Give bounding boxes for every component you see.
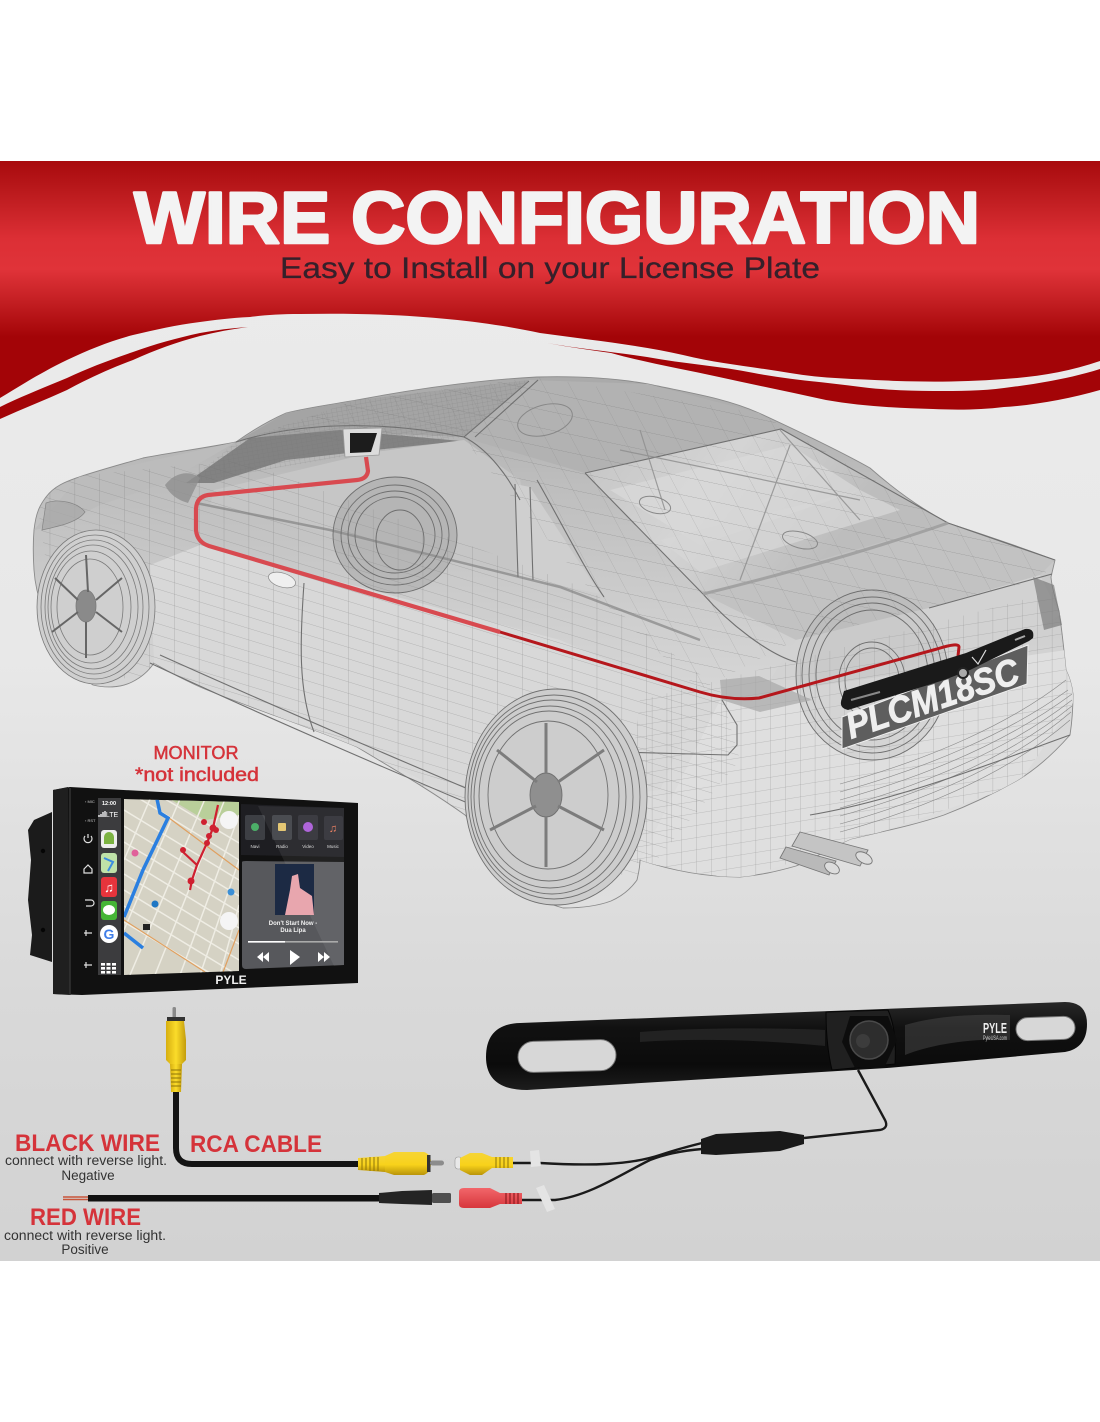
side panel (53, 787, 70, 995)
google letter: G (104, 926, 115, 942)
app music (101, 877, 117, 897)
locate button (220, 912, 238, 930)
bar camera lens (958, 668, 968, 678)
heading: RED WIRE (30, 1204, 141, 1231)
navi pin (251, 823, 259, 831)
strain ribs (171, 1070, 181, 1086)
front interior wheel (333, 477, 457, 593)
left swoosh (0, 327, 248, 419)
app labels: Navi (250, 844, 260, 849)
message bubble (103, 905, 115, 915)
grey panel background (0, 161, 1100, 1261)
white tip (455, 1157, 462, 1169)
reset labels: ‹ RST (85, 818, 96, 823)
right mounting slot (1016, 1016, 1075, 1041)
left button icons (84, 834, 94, 968)
inline connector (701, 1131, 804, 1155)
signal bars (99, 811, 105, 817)
rewind control (257, 952, 269, 962)
hood (34, 442, 236, 530)
mount holes (41, 849, 45, 853)
plate text: PLCM18SC (841, 650, 1025, 747)
monitor body (53, 787, 358, 995)
red wire route on car (196, 457, 959, 699)
cable tag red (536, 1185, 555, 1212)
progress bar (248, 941, 338, 943)
reset labels: ‹ MIC (85, 799, 95, 804)
signal: LTE (106, 812, 118, 819)
bar slot left (851, 692, 880, 700)
album art (275, 864, 314, 915)
collar (427, 1155, 430, 1172)
horizontal plug pin (430, 1160, 444, 1166)
app tile navi (245, 815, 265, 840)
pink pin (132, 850, 138, 856)
app maps (101, 853, 117, 873)
rear seats (610, 446, 860, 522)
vertical plug pin (172, 1007, 176, 1018)
monitor heading: MONITOR (154, 743, 238, 763)
DC plug tip (432, 1193, 451, 1203)
horizontal plug body (385, 1152, 431, 1175)
upper fine mesh (196, 382, 526, 476)
rear deck (1020, 576, 1060, 616)
headrests (514, 398, 819, 552)
roof mesh (236, 377, 1055, 690)
forward control (318, 952, 330, 962)
bar slot right (1015, 636, 1025, 640)
orange avenues (124, 815, 239, 975)
red female power connector (459, 1188, 522, 1208)
map screen (124, 799, 239, 976)
android glyph (104, 832, 114, 844)
female RCA connector (455, 1153, 513, 1175)
lead to power (522, 1149, 702, 1200)
rear taillight (1033, 577, 1062, 630)
track artist: Dua Lipa (280, 928, 306, 934)
car stereo monitor (28, 787, 358, 995)
car panels and mesh (34, 377, 1075, 880)
screen glare (258, 806, 344, 966)
play control (290, 950, 300, 965)
zoom button (220, 811, 238, 829)
app grid (101, 963, 116, 974)
bar body (486, 1002, 1087, 1090)
horizontal ribs (362, 1157, 378, 1171)
door handle (267, 569, 297, 591)
car body (33, 377, 1073, 908)
backup camera bar (486, 1002, 1087, 1090)
app labels: Video (302, 844, 314, 849)
trunk lid (706, 583, 1010, 640)
description: connect with reverse light. (4, 1228, 166, 1243)
side door panels (150, 545, 528, 750)
radio glyph (278, 823, 286, 831)
app labels: Radio (276, 844, 288, 849)
right swoosh (547, 343, 1100, 410)
monitor frame (343, 428, 382, 457)
RCA cable label: RCA CABLE (190, 1131, 322, 1158)
side mirror (165, 473, 200, 503)
red wire label (4, 1204, 166, 1257)
cable tag yellow (530, 1150, 541, 1167)
app tile video (298, 815, 318, 840)
left bar highlight (640, 1028, 825, 1046)
body outlines (150, 380, 1070, 825)
blue pin right (228, 888, 234, 896)
horizontal plug strain relief (358, 1156, 385, 1172)
mount hole lower (41, 928, 45, 932)
progress fill (248, 941, 285, 943)
vertical plug collar (167, 1017, 185, 1021)
exhaust pipes (780, 832, 874, 876)
brand url: PyleUSA.com (983, 1036, 1007, 1042)
side highlight (69, 788, 71, 995)
red body (459, 1188, 522, 1208)
rear mesh (620, 590, 1075, 880)
stripped red end (63, 1197, 90, 1200)
heading: BLACK WIRE (15, 1130, 160, 1157)
rear fascia (640, 650, 1075, 880)
music glyph: ♫ (329, 823, 337, 835)
music panel (242, 861, 344, 969)
top apps panel (241, 804, 344, 857)
camera collar (826, 1010, 895, 1070)
clock: 12:00 (102, 801, 116, 807)
red route (183, 805, 218, 890)
album figure (285, 874, 314, 915)
black wire label (5, 1130, 167, 1183)
rear window struts (620, 430, 860, 580)
red ribs (506, 1193, 518, 1204)
left mounting slot (518, 1039, 616, 1073)
app tile radio (272, 815, 292, 840)
power lead (63, 1190, 451, 1205)
brand PYLE: PYLE (983, 1020, 1007, 1037)
camera wiring (513, 1070, 886, 1200)
parcel shelf (709, 490, 900, 568)
ribs (496, 1157, 508, 1168)
banner main shape (0, 161, 1100, 398)
app google (100, 925, 118, 943)
windshield band (240, 391, 514, 440)
title: WIRE CONFIGURATION (134, 178, 980, 259)
DC plug boot (379, 1190, 432, 1205)
monitor screen (350, 433, 377, 453)
dark windshield base (186, 430, 461, 483)
rear wire section (500, 632, 959, 699)
front wire section (196, 457, 500, 632)
near rear wheel (465, 689, 647, 905)
bar check mark (972, 650, 986, 664)
finish flag (143, 924, 150, 930)
camera bar on plate (841, 629, 1033, 710)
app messages (101, 901, 117, 920)
app android (101, 830, 117, 848)
right bar highlight (905, 1015, 1010, 1055)
headlight (42, 501, 85, 530)
yellow body (460, 1153, 513, 1175)
plate background (842, 645, 1028, 749)
vertical plug strain relief (170, 1064, 182, 1092)
description: connect with reverse light. (5, 1153, 167, 1168)
front wheel (37, 530, 155, 684)
wireframe car (33, 377, 1075, 908)
side glass front (227, 440, 520, 488)
brand logo: PYLE (215, 973, 247, 987)
RCA cable (166, 1007, 444, 1175)
lead to RCA (513, 1143, 702, 1164)
blue route (124, 799, 168, 948)
minor streets (124, 799, 239, 976)
rear far wheel (796, 590, 948, 760)
app labels: Music (327, 844, 340, 849)
side glass rear (516, 484, 576, 580)
red header banner (0, 161, 1100, 419)
rear window lower band (703, 523, 948, 594)
lens centre (856, 1034, 870, 1048)
rear-view monitor on car (343, 428, 382, 457)
blue pin (152, 900, 158, 908)
video glyph (303, 822, 313, 832)
rear bracket (28, 812, 52, 962)
camera lens (850, 1021, 888, 1059)
subtitle: Easy to Install on your License Plate (280, 252, 820, 285)
monitor label (135, 743, 259, 786)
polarity: Positive (61, 1242, 109, 1257)
side mesh (34, 460, 740, 880)
rear window (586, 430, 872, 566)
app tile music (324, 816, 343, 840)
bumper fine lines (840, 680, 1072, 832)
roof (546, 384, 761, 472)
black cable run (176, 1092, 360, 1164)
red pins (180, 819, 219, 884)
park (170, 799, 239, 820)
camera lens housing (842, 1016, 897, 1068)
license plate (841, 629, 1033, 749)
app labels (250, 844, 340, 849)
side taillight (720, 676, 812, 712)
map base (124, 799, 239, 975)
lead to camera (804, 1070, 886, 1138)
beltline band (196, 503, 700, 640)
not included note: *not included (135, 765, 259, 786)
status strip (98, 798, 121, 975)
maps route (104, 858, 113, 871)
music note: ♫ (104, 880, 114, 895)
track title: Don't Start Now - (269, 921, 317, 927)
vertical plug body (166, 1021, 186, 1064)
reset labels (85, 799, 96, 823)
polarity: Negative (61, 1168, 115, 1183)
black lead (88, 1195, 381, 1202)
